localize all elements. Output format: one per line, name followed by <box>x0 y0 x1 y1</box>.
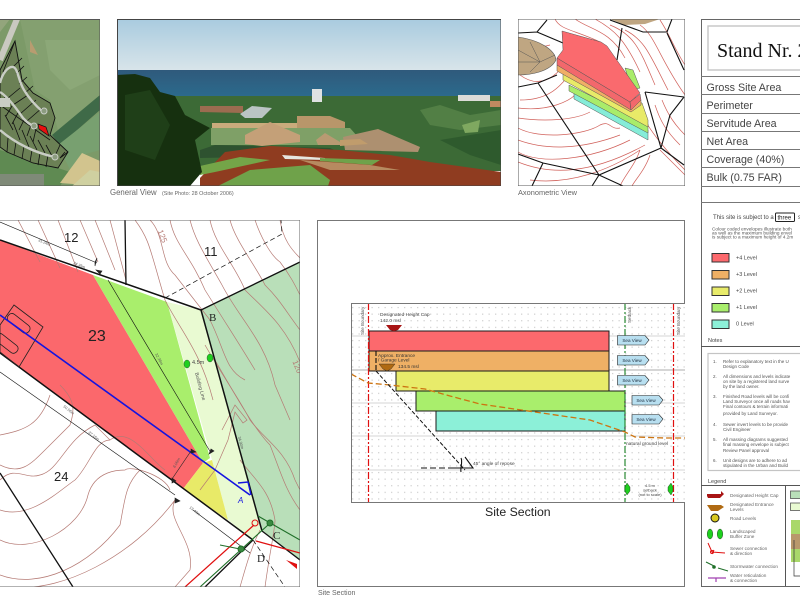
sheet: symbol legend: & direction <box>730 551 753 556</box>
site plan: stand number 24: 24 <box>54 469 68 484</box>
sheet: symbol legend: Water reticulation <box>730 573 767 578</box>
sheet: notes box: 3. <box>713 394 717 399</box>
section: setback markers <box>625 483 673 495</box>
section: site boundary label left: Site Boundary <box>360 306 365 335</box>
sheet: area rows: Gross Site Area <box>706 82 781 94</box>
site plan: yellow +2 envelope <box>183 460 228 520</box>
site plan: contours <box>0 220 300 587</box>
site plan: parking bay <box>0 305 43 367</box>
sheet: envelope explanation: Colour coded envelopes illustrate both <box>712 226 792 232</box>
sheet: symbol legend: Designated Height Cap <box>730 493 779 498</box>
aerial: highlighted stand <box>38 124 49 136</box>
sheet: notes box: 2. <box>713 374 717 379</box>
aerial: internal roads <box>0 67 55 157</box>
site plan: stand number 11: 11 <box>204 244 218 259</box>
sheet: notes box: 5. <box>713 437 717 442</box>
sheet: notes box: Sewer invert levels to be provide <box>723 422 789 427</box>
sheet: level legend: +4 Level <box>736 256 757 262</box>
caption: site section: Site Section <box>318 590 355 597</box>
section: angle label: 45° angle of repose <box>473 461 515 467</box>
sheet: notes box: Review Panel approval <box>723 448 769 453</box>
section: height cap text: Designated Height Cap <box>380 312 430 318</box>
section: garage level text: / Garage Level <box>378 358 409 364</box>
icon: entrance arrow <box>379 364 395 371</box>
section: sea view arrows: Sea View <box>636 398 656 403</box>
site plan: dimension labels <box>38 238 244 517</box>
section: sea view arrows: Sea View <box>622 378 642 383</box>
sheet: notes box <box>708 354 800 470</box>
site plan: red +4 envelope <box>0 240 203 489</box>
site plan: stand number 23: 23 <box>88 328 106 345</box>
sheet: notes box: 6. <box>713 458 717 463</box>
sheet: level legend: +2 Level <box>736 288 757 294</box>
site plan: stand number 12: 12 <box>64 230 78 245</box>
section: setback text <box>638 483 662 497</box>
panel: axonometric view <box>518 19 685 186</box>
caption: general view: General View <box>110 188 157 197</box>
site plan: dimension labels: 32.38m <box>154 353 164 366</box>
sheet: area rows: Coverage (40%) <box>706 154 784 166</box>
site plan: dimension labels: 34.90m <box>237 436 244 449</box>
sheet: notes heading: Notes <box>708 338 723 344</box>
axonometric: lot boundaries <box>518 19 684 186</box>
site plan: green +1 envelope <box>93 275 210 463</box>
sheet: level legend: 0 Level <box>736 322 754 328</box>
sheet: notes box: stipulated in the Urban and Build <box>723 463 789 468</box>
sheet: notes box: All massing diagrams suggested <box>723 437 788 442</box>
section: angle of repose line <box>376 351 473 472</box>
sheet: notes box: Finished Road levels will be confi <box>723 394 789 399</box>
icon: height cap arrow <box>386 325 402 331</box>
sheet: symbol legend <box>706 491 779 583</box>
site plan: dimension labels: 37.16m <box>87 431 100 442</box>
sheet: symbol legend: Road Levels <box>730 516 757 521</box>
section: sea view arrows <box>618 336 663 424</box>
sheet: notes box: 1. <box>713 359 717 364</box>
section: setback text: setback <box>643 488 657 492</box>
site plan: label 125 contour: 125 <box>156 228 169 245</box>
sheet: area rows <box>701 76 800 202</box>
section: sea view arrows: Sea View <box>622 338 642 343</box>
panel: info sheet <box>701 20 800 586</box>
sheet: area rows: Servitude Area <box>706 118 777 130</box>
sheet: area rows: Bulk (0.75 FAR) <box>706 172 782 184</box>
axonometric: massing stack <box>557 31 648 140</box>
sheet: area rows: Perimeter <box>706 100 753 112</box>
sheet: notes box: Final contours & terrain informati <box>723 404 788 409</box>
sheet: notes box: Civil Engineer <box>723 427 751 432</box>
site plan: dimension labels: 6.00m <box>172 457 181 468</box>
sheet: level legend: +3 Level <box>736 272 757 278</box>
sheet: envelope explanation: as well as the maximum building envel <box>712 230 792 236</box>
sheet: symbol legend: Buffer Zone <box>730 534 755 539</box>
site plan: dimension labels: 13.40m <box>188 506 201 517</box>
sheet: envelope explanation: is subject to a maximum height of 4.2m <box>712 234 793 240</box>
site plan: servitude green area <box>201 262 300 560</box>
sheet: symbol legend: & connection <box>730 578 757 583</box>
site plan: dimension labels: 50.56m <box>62 405 75 416</box>
site plan: corner D: D <box>257 553 265 565</box>
sheet: symbol legend: Landscaped <box>730 529 756 534</box>
sheet: intro statement: This site is subject to a <box>713 215 774 221</box>
aerial: highway <box>0 19 17 60</box>
site plan: corner C: C <box>273 530 280 542</box>
sheet: notes box: 4. <box>713 422 717 427</box>
site plan: building line label: Building Line <box>193 372 206 401</box>
section: natural ground line <box>351 374 685 438</box>
sheet: symbol legend: Designated Entrance <box>730 502 774 507</box>
sheet: symbol legend: Sewer connection <box>730 546 768 551</box>
sheet: title box <box>708 26 800 70</box>
sheet: area rows: Net Area <box>706 136 748 148</box>
sheet: intro statement <box>713 213 800 222</box>
section: setback text: (not to scale) <box>638 492 662 497</box>
sheet: level legend: +1 Level <box>736 305 757 311</box>
sheet: envelope explanation <box>712 226 793 240</box>
section: height cap level: 142.0 msl <box>380 318 401 324</box>
sheet: notes box: Design Code <box>723 364 750 369</box>
section: site boundary and setback lines <box>368 303 674 503</box>
section: site boundary label right: Site Boundary <box>676 306 681 335</box>
site plan: setback marker <box>184 354 213 368</box>
site plan: label 120 contour: 120 <box>291 359 304 375</box>
section: entrance level text: Approx. Entrance <box>378 353 415 359</box>
site plan: corner B: B <box>209 312 216 324</box>
sheet: notes box: All dimensions and levels indicate <box>723 374 791 379</box>
axonometric: contours <box>518 19 685 186</box>
panel: site plan <box>0 220 304 587</box>
section: setback label: Setback <box>627 306 632 323</box>
section: sea view arrows: Sea View <box>636 417 656 422</box>
section: natural ground label: natural ground level <box>626 441 668 447</box>
sheet: intro statement: three <box>778 216 792 222</box>
axonometric: terrain mounds <box>518 37 556 75</box>
panel: site section frame <box>318 220 686 586</box>
sheet: notes box: Refer to explanatory text in the U <box>723 359 789 364</box>
site plan: section line A <box>0 315 251 505</box>
site plan: service connections <box>185 516 300 587</box>
site plan: lot lines <box>0 220 300 587</box>
sheet: notes box: on site by a registered land surve <box>723 379 790 384</box>
sheet: notes box: provided by Land Surveyor. <box>723 411 778 416</box>
sheet: notes box: final massing envelope is subject <box>723 442 790 447</box>
site plan: dimension labels: 31.24m <box>38 238 51 247</box>
sheet: notes box: Unit designs are to adhere to ad <box>723 458 788 463</box>
site plan: pale setback area <box>167 302 262 540</box>
sheet: legend heading: Legend <box>708 479 726 485</box>
caption: site photo date: (Site Photo: 28 October 2006) <box>162 191 234 197</box>
sheet: level legend <box>712 254 757 328</box>
section: title: Site Section <box>485 505 551 519</box>
section chart <box>351 303 686 503</box>
sheet: right legend swatches <box>790 491 800 576</box>
panel: aerial location map <box>0 19 100 186</box>
sheet: symbol legend: Stormwater connection <box>730 564 778 569</box>
section: setback text: 4.5 m <box>645 483 656 488</box>
caption: axonometric view: Axonometric View <box>518 188 578 197</box>
site plan: setback marker: 4.5m <box>192 360 205 366</box>
section: entrance level value: 134.5 msl <box>398 364 419 370</box>
site plan: section line A: A <box>237 496 243 505</box>
sheet: notes box: by the land owner. <box>723 384 760 389</box>
sheet: symbol legend: Levels <box>730 507 744 512</box>
section: level bars <box>369 331 625 431</box>
sheet: notes box: Land Surveyor once all roads hav <box>723 399 791 404</box>
panel: general view photo <box>117 19 501 186</box>
section: sea view arrows: Sea View <box>622 358 642 363</box>
site plan: dimension labels: 34.35m <box>73 261 86 270</box>
site plan: dimension arrows <box>95 258 214 503</box>
aerial: estate lots <box>0 41 68 168</box>
